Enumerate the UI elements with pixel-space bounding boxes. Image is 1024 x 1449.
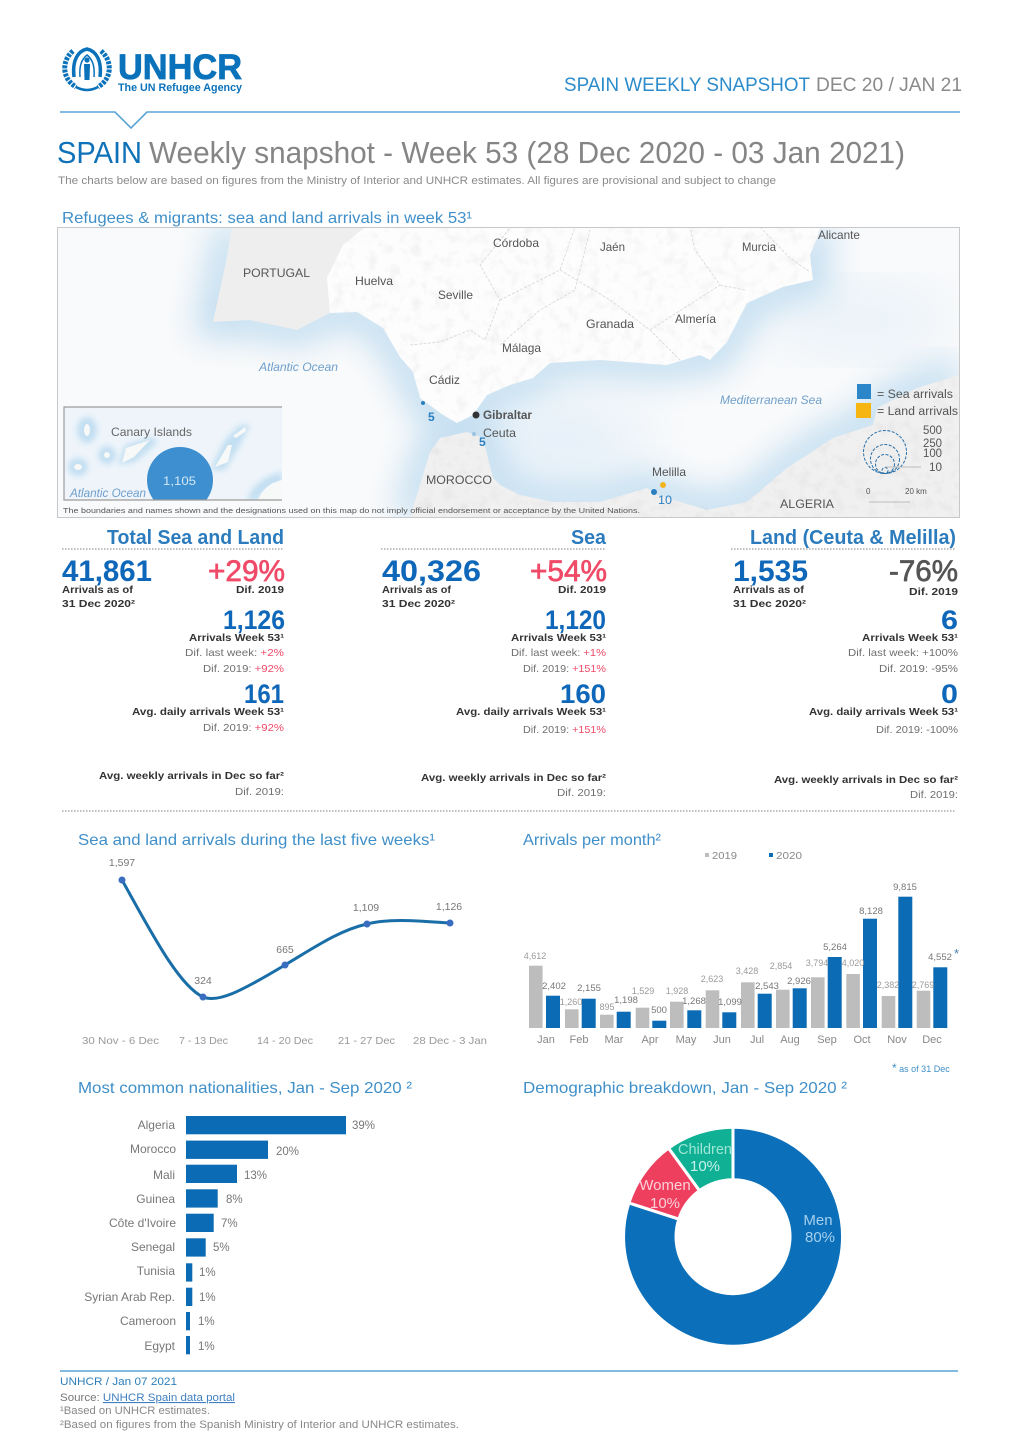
map labels: MOROCCO [426, 473, 492, 487]
daily arrivals [456, 679, 607, 736]
values 2019: 2,382 [877, 980, 899, 990]
weekly arrivals: 1,126 [223, 605, 285, 635]
slice: women: Women [639, 1177, 691, 1194]
header label: DEC 20 / JAN 21 [816, 75, 962, 96]
change 2019: +29% [208, 555, 285, 588]
inset: Canary Islands: Canary Islands [111, 425, 192, 439]
slice: children: 10% [690, 1158, 720, 1175]
daily arrivals: 0 [941, 679, 958, 709]
month axis: Nov [887, 1034, 907, 1046]
weekly average [774, 774, 959, 801]
header label: SPAIN WEEKLY SNAPSHOT [564, 75, 810, 96]
land: Spain [327, 227, 820, 423]
values 2019: 4,612 [524, 951, 546, 961]
values 2020: 1,198 [614, 995, 638, 1006]
weekly arrivals [185, 605, 285, 675]
weekly arrivals: Arrivals Week 53¹ [511, 632, 607, 644]
values 2020: 2,155 [577, 983, 601, 994]
panel: sea: 31 Dec 2020² [382, 598, 456, 610]
month axis: Feb [570, 1034, 588, 1046]
bar chart: nationalities: Syrian Arab Rep. [84, 1290, 175, 1304]
map labels: Cádiz [429, 373, 460, 387]
heading: Sea [571, 527, 607, 549]
bar chart: nationalities: Guinea [136, 1192, 175, 1206]
footer: Source: UNHCR Spain data portal [60, 1392, 235, 1404]
weekly average: Dif. 2019: [557, 787, 606, 799]
weekly arrivals: Dif. 2019: +151% [523, 663, 606, 675]
bar chart: nationalities: 1% [199, 1267, 216, 1279]
legend: 2019 [712, 850, 737, 862]
month axis: Dec [922, 1034, 942, 1046]
map labels: Huelva [355, 274, 393, 288]
weekly arrivals: Dif. last week: +1% [511, 647, 606, 659]
month axis: Aug [780, 1034, 800, 1046]
line chart: 1,597 [109, 857, 135, 869]
map legend [856, 384, 958, 502]
values 2020: 2,926 [787, 976, 811, 987]
weekly arrivals: Dif. last week: +2% [185, 647, 284, 659]
line chart [82, 857, 487, 1047]
bar chart: nationalities [84, 1116, 375, 1354]
daily arrivals: 160 [560, 679, 606, 709]
values 2019: 2,854 [770, 961, 792, 971]
panel: land [731, 527, 959, 801]
bar chart: nationalities: 1% [199, 1292, 216, 1304]
donut chart: demographics [624, 1127, 843, 1346]
values 2020: 500 [651, 1005, 667, 1016]
values 2019: 4,020 [842, 958, 864, 968]
values 2020 [542, 882, 959, 1016]
bar chart: nationalities: 7% [221, 1218, 238, 1230]
values 2020: 2,402 [542, 981, 566, 992]
header label [564, 75, 962, 96]
values 2020: 8,128 [859, 906, 883, 917]
map legend: 0 [866, 487, 871, 496]
weekly average [421, 772, 607, 799]
panel: land: Dif. 2019 [909, 586, 958, 598]
weekly average: Avg. weekly arrivals in Dec so far² [421, 772, 607, 784]
map labels: Murcia [742, 240, 776, 254]
map labels: PORTUGAL [243, 266, 310, 280]
inset: Canary Islands: 1,105 [163, 474, 196, 488]
bar chart: nationalities: Senegal [131, 1240, 175, 1254]
month axis: Jan [537, 1034, 555, 1046]
map labels: ALGERIA [780, 497, 834, 511]
values 2020: 5,264 [823, 942, 847, 953]
land: Morocco and Algeria [410, 375, 960, 518]
bar chart: nationalities: Côte d'Ivoire [109, 1216, 176, 1230]
heading: demographics: Demographic breakdown, Jan - Sep 2020 ² [523, 1080, 848, 1097]
bar chart: nationalities: 39% [352, 1120, 375, 1132]
values 2019 [524, 951, 934, 1012]
map labels: Alicante [818, 228, 860, 242]
daily arrivals: Dif. 2019: +92% [203, 722, 284, 734]
map legend: 20 km [905, 487, 927, 496]
values 2019: 895 [599, 1002, 615, 1012]
weekly arrivals: 6 [941, 605, 958, 635]
logo: UNHCR: UNHCR [118, 48, 242, 87]
map markers [421, 401, 666, 495]
legend: 2020 [776, 850, 802, 862]
heading: nationalities: Most common nationalities, Jan - Sep 2020 ² [78, 1080, 413, 1097]
panel: total sea and land: Dif. 2019 [236, 584, 284, 596]
heading: Total Sea and Land [107, 527, 284, 549]
values 2019: 1,928 [666, 986, 688, 996]
legend [705, 850, 802, 862]
weekly arrivals: Dif. last week: +100% [848, 647, 958, 659]
line chart: 7 - 13 Dec [179, 1035, 228, 1047]
map labels: Mediterranean Sea [720, 393, 822, 407]
line chart: 665 [276, 944, 294, 956]
map labels [243, 228, 860, 511]
map labels: Jaén [600, 240, 625, 254]
slice: men: 80% [805, 1229, 835, 1246]
month axis: Jul [750, 1034, 764, 1046]
slice: men [624, 1127, 843, 1346]
subtitle: The charts below are based on figures from the Ministry of Interior and UNHCR estimates. All figures are provisional and subject to change [58, 175, 776, 187]
values 2019: 2,623 [701, 974, 723, 984]
inset: Canary Islands [64, 407, 282, 513]
slice: men: Men [803, 1212, 833, 1229]
line chart: 30 Nov - 6 Dec [82, 1035, 159, 1047]
map legend: 10 [929, 462, 942, 474]
change 2019: -76% [889, 555, 958, 588]
map labels: Almería [675, 312, 716, 326]
map legend: = Sea arrivals [877, 389, 953, 401]
panel: total sea and land: 31 Dec 2020² [62, 598, 136, 610]
line chart: 1,126 [436, 901, 462, 913]
line chart: 324 [194, 975, 212, 987]
weekly average: Avg. weekly arrivals in Dec so far² [99, 770, 285, 782]
daily arrivals: Dif. 2019: +151% [523, 724, 606, 736]
slice: women: 10% [650, 1195, 680, 1212]
month axis: Jun [713, 1034, 731, 1046]
map labels: Ceuta [483, 426, 516, 440]
values 2019: 3,794 [806, 958, 828, 968]
weekly arrivals: Dif. 2019: +92% [203, 663, 284, 675]
daily arrivals [132, 679, 285, 734]
month axis [537, 1034, 942, 1046]
month axis: Apr [641, 1034, 659, 1046]
heading: map: Refugees & migrants: sea and land arrivals in week 53¹ [62, 210, 472, 227]
month axis: May [676, 1034, 697, 1046]
weekly arrivals: Dif. 2019: -95% [879, 663, 958, 675]
bar chart: nationalities: 1% [198, 1341, 215, 1353]
weekly arrivals [511, 605, 607, 675]
header rule with notch [60, 112, 960, 128]
panel: land: Arrivals as of [733, 584, 805, 596]
footer: UNHCR / Jan 07 2021 [60, 1376, 177, 1388]
weekly average [99, 770, 285, 798]
daily arrivals [809, 679, 959, 736]
values 2020: 2,543 [755, 981, 779, 992]
map labels: Córdoba [493, 236, 539, 250]
panel: sea: Arrivals as of [382, 584, 452, 596]
month axis: Mar [605, 1034, 624, 1046]
logo: UNHCR: The UN Refugee Agency [118, 82, 243, 94]
values 2019: 1,529 [632, 986, 654, 996]
weekly average: Dif. 2019: [910, 789, 958, 801]
values 2019: 2,769 [912, 980, 934, 990]
line chart: 21 - 27 Dec [338, 1035, 395, 1047]
map labels: 5 [428, 410, 435, 424]
values 2019: 1,260 [560, 997, 582, 1007]
weekly average: Dif. 2019: [235, 786, 284, 798]
map legend: = Land arrivals [877, 406, 958, 418]
map legend: 250 [923, 438, 942, 450]
bar chart: nationalities: 5% [213, 1242, 230, 1254]
map labels: 5 [479, 435, 486, 449]
panel: land: 31 Dec 2020² [733, 598, 807, 610]
weekly arrivals: 1,120 [545, 605, 606, 635]
bar chart: nationalities: Mali [153, 1168, 175, 1182]
icon: UNHCR emblem [65, 49, 109, 90]
panel: map [57, 227, 960, 518]
weekly arrivals [848, 605, 959, 675]
bar chart: nationalities: Algeria [138, 1118, 175, 1132]
line chart: 1,109 [353, 902, 379, 914]
bars 2019 [529, 966, 930, 1028]
footnote: as of 31 Dec: * as of 31 Dec [892, 1061, 950, 1075]
inset: Canary Islands: Atlantic Ocean [69, 486, 146, 500]
weekly arrivals: Arrivals Week 53¹ [189, 632, 285, 644]
slice: children: Children [678, 1141, 732, 1158]
heading: bar chart: Arrivals per month² [523, 832, 662, 849]
map labels: Atlantic Ocean [258, 360, 338, 374]
bars 2020 [546, 897, 947, 1028]
values 2020: 1,099 [718, 997, 742, 1008]
title: SPAIN [57, 135, 142, 170]
values 2020: 9,815 [893, 882, 917, 893]
bar chart: nationalities: 1% [198, 1316, 215, 1328]
heading: Land (Ceuta & Melilla) [750, 527, 956, 549]
line chart: 14 - 20 Dec [257, 1035, 313, 1047]
heading: line chart: Sea and land arrivals during the last five weeks¹ [78, 832, 435, 849]
values 2019: 3,428 [736, 966, 758, 976]
footer [60, 1376, 459, 1431]
bar chart: nationalities: Tunisia [137, 1264, 175, 1278]
bar chart: nationalities: Egypt [144, 1339, 176, 1353]
total arrivals: 40,326 [382, 555, 481, 588]
weekly average: Avg. weekly arrivals in Dec so far² [774, 774, 959, 786]
slice: children [669, 1127, 733, 1191]
bar chart: nationalities: 8% [226, 1194, 243, 1206]
land: Portugal [213, 227, 365, 330]
values 2020: 4,552 [928, 952, 952, 963]
map legend: 100 [923, 448, 942, 460]
logo: UNHCR [65, 48, 243, 94]
panel: sea: Dif. 2019 [558, 584, 606, 596]
month axis: Oct [853, 1034, 871, 1046]
total arrivals: 41,861 [62, 555, 152, 588]
daily arrivals: Avg. daily arrivals Week 53¹ [809, 706, 959, 718]
bar chart: nationalities: Cameroon [120, 1314, 176, 1328]
panel: total sea and land: Arrivals as of [62, 584, 134, 596]
daily arrivals: Avg. daily arrivals Week 53¹ [132, 706, 285, 718]
bar chart: nationalities: 20% [276, 1146, 299, 1158]
total arrivals: 1,535 [733, 555, 808, 588]
map labels: Melilla [652, 465, 686, 479]
panel: sea [381, 527, 607, 799]
change 2019: +54% [530, 555, 607, 588]
bar chart [524, 850, 959, 1075]
month axis: Sep [817, 1034, 837, 1046]
weekly arrivals: Arrivals Week 53¹ [862, 632, 959, 644]
line chart: 28 Dec - 3 Jan [413, 1035, 487, 1047]
bar chart: nationalities: Morocco [130, 1142, 176, 1156]
panel: total sea and land [62, 527, 285, 798]
values 2020: * [954, 946, 959, 961]
map labels: Gibraltar [483, 408, 532, 422]
map labels: 10 [658, 493, 672, 507]
daily arrivals: Avg. daily arrivals Week 53¹ [456, 706, 607, 718]
slice: women [629, 1148, 700, 1219]
map disclaimer: The boundaries and names shown and the designations used on this map do not imply official endorsement or acceptance by the United Nations. [63, 508, 640, 515]
values 2020: 1,268 [682, 996, 706, 1007]
map labels: Granada [586, 317, 634, 331]
title: Weekly snapshot - Week 53 (28 Dec 2020 - 03 Jan 2021) [149, 135, 905, 170]
daily arrivals: Dif. 2019: -100% [876, 724, 958, 736]
map legend: 500 [923, 425, 942, 437]
daily arrivals: 161 [244, 679, 284, 709]
map labels: Seville [438, 288, 473, 302]
map labels: Málaga [502, 341, 541, 355]
bar chart: nationalities: 13% [244, 1170, 267, 1182]
footer: ¹Based on UNHCR estimates. [60, 1405, 210, 1417]
footer: ²Based on figures from the Spanish Ministry of Interior and UNHCR estimates. [60, 1419, 459, 1431]
